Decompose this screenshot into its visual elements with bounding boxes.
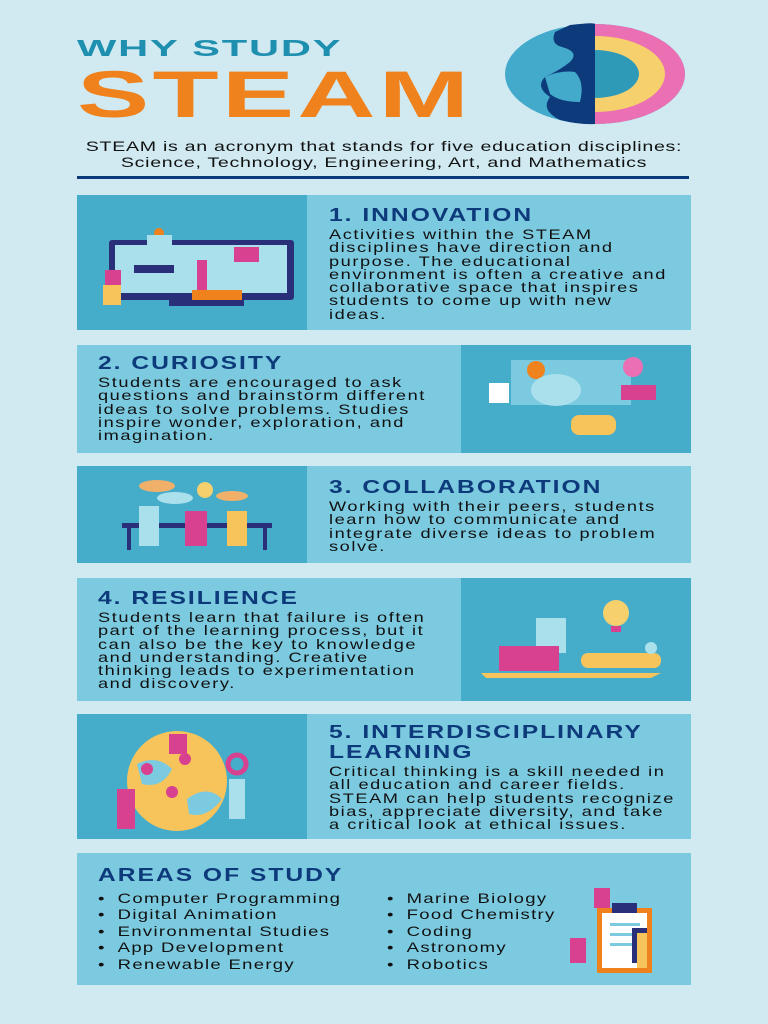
text: and understanding. Creative [98, 649, 369, 665]
text [98, 374, 426, 443]
title: steam: STEAM [77, 57, 472, 131]
icon: lightbulb illustration [461, 578, 691, 701]
text: Activities within the STEAM [329, 226, 593, 242]
icon: clipboard illustration [570, 888, 652, 973]
panel: areas of study [77, 853, 691, 985]
heading: 4. RESILIENCE [98, 587, 299, 608]
list: right column: Marine Biology [407, 890, 547, 906]
list: right column: Coding [407, 923, 473, 939]
list: right column [388, 890, 556, 972]
text: thinking leads to experimentation [98, 662, 416, 678]
title: why study: WHY STUDY [77, 35, 342, 61]
text: collaborative space that inspires [329, 279, 639, 295]
text: solve. [329, 538, 386, 554]
icon: screen illustration [77, 195, 307, 330]
text: part of the learning process, but it [98, 622, 424, 638]
subtitle: STEAM is an acronym that stands for five education disciplines: [86, 138, 682, 154]
panel: resilience [77, 578, 691, 701]
text: Working with their peers, students [329, 498, 656, 514]
list: left column: Renewable Energy [118, 956, 295, 972]
heading: AREAS OF STUDY [98, 864, 343, 885]
panel: interdisciplinary learning [77, 714, 691, 839]
text [98, 609, 425, 691]
panel: collaboration [77, 466, 691, 563]
text: questions and brainstorm different [98, 387, 426, 403]
text: all education and career fields. [329, 776, 626, 792]
panel: curiosity [77, 345, 691, 453]
list: left column [98, 890, 341, 972]
text: Students are encouraged to ask [98, 374, 403, 390]
list: right column: Astronomy [407, 939, 507, 955]
panel: innovation [77, 195, 691, 330]
text: ideas to solve problems. Studies [98, 401, 410, 417]
icon: team table illustration [77, 466, 307, 563]
list: right column: Robotics [407, 956, 489, 972]
text: learn how to communicate and [329, 511, 621, 527]
text: can also be the key to knowledge [98, 636, 417, 652]
heading: 3. COLLABORATION [329, 476, 602, 497]
icon: brainstorm illustration [461, 345, 691, 453]
text: Critical thinking is a skill needed in [329, 763, 665, 779]
text: bias, appreciate diversity, and take [329, 803, 664, 819]
text: imagination. [98, 427, 215, 443]
icon: globe [505, 23, 685, 124]
subtitle [86, 138, 682, 170]
text: a critical look at ethical issues. [329, 816, 627, 832]
list: left column: Environmental Studies [118, 923, 330, 939]
text: ideas. [329, 306, 387, 322]
text: purpose. The educational [329, 253, 572, 269]
text: disciplines have direction and [329, 239, 614, 255]
subtitle: Science, Technology, Engineering, Art, and Mathematics [121, 154, 647, 170]
list: left column: Computer Programming [118, 890, 341, 906]
text: integrate diverse ideas to problem [329, 525, 656, 541]
heading [329, 721, 643, 762]
list: right column: Food Chemistry [407, 906, 556, 922]
list: left column: App Development [118, 939, 284, 955]
text: inspire wonder, exploration, and [98, 414, 405, 430]
text: and discovery. [98, 675, 236, 691]
heading: 5. INTERDISCIPLINARY [329, 721, 643, 742]
text: STEAM can help students recognize [329, 790, 675, 806]
text [329, 226, 667, 322]
text [329, 763, 675, 832]
text: students to come up with new [329, 292, 612, 308]
text: environment is often a creative and [329, 266, 667, 282]
icon: globe with people [77, 714, 307, 839]
heading: LEARNING [329, 741, 473, 762]
heading: 2. CURIOSITY [98, 352, 283, 373]
heading: 1. INNOVATION [329, 204, 533, 225]
text: Students learn that failure is often [98, 609, 425, 625]
list: left column: Digital Animation [118, 906, 278, 922]
text [329, 498, 656, 554]
